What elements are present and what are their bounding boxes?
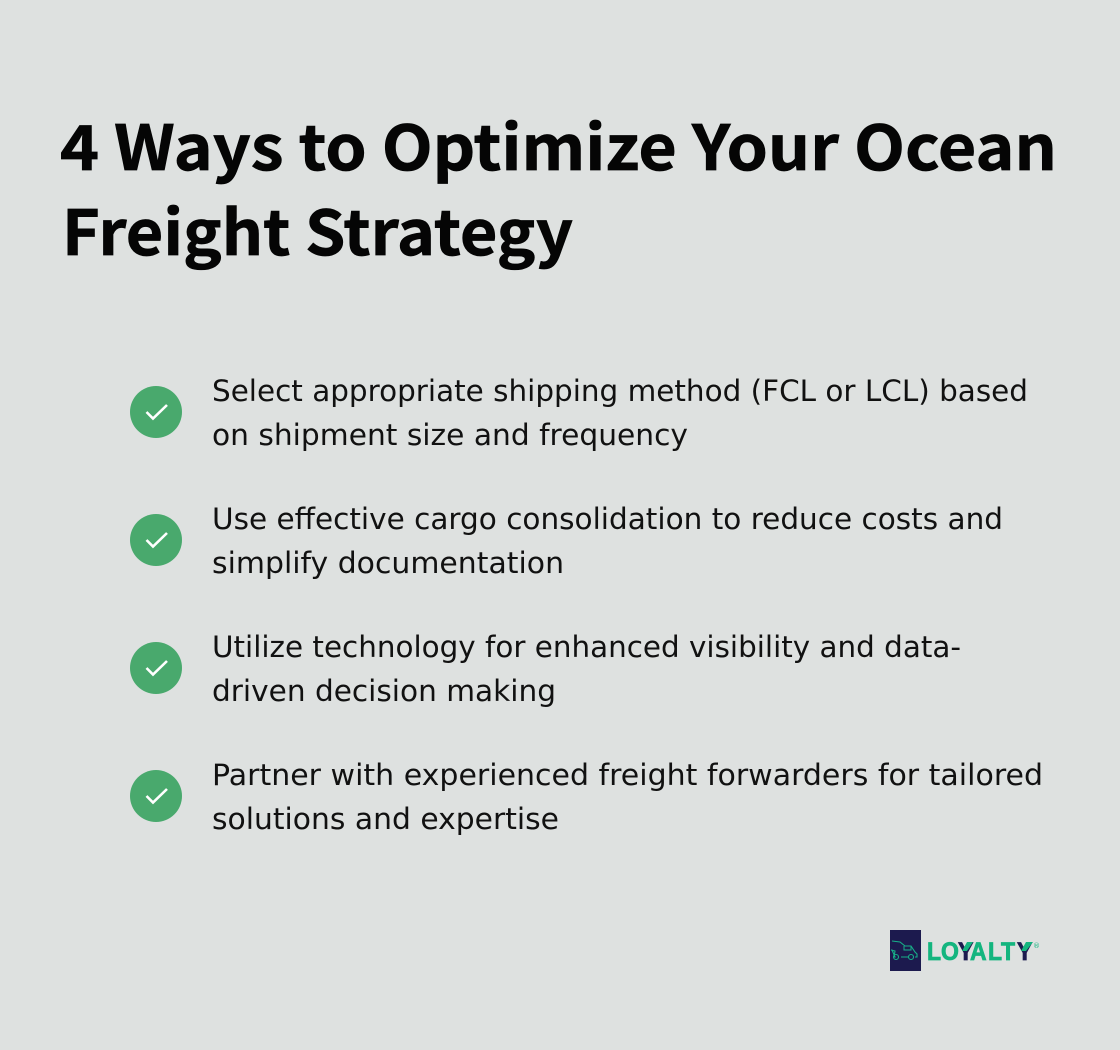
text: item 3: driven decision making: [212, 674, 556, 708]
logo wordmark: Y: [958, 938, 973, 966]
text: item 3: [212, 630, 961, 708]
logo wordmark: ®: [1033, 942, 1040, 950]
logo wordmark: [927, 938, 1040, 966]
text: item 4: [212, 758, 1043, 836]
logo wordmark: T: [1001, 938, 1015, 966]
icon: check badge 1: [130, 386, 182, 438]
logo wordmark: Y: [1017, 938, 1032, 966]
text: item 3: Utilize technology for enhanced visibility and data-: [212, 630, 961, 664]
title: [60, 98, 1057, 273]
text: item 1: [212, 374, 1028, 452]
text: item 4: solutions and expertise: [212, 802, 559, 836]
icon: logo truck tile: [890, 930, 921, 971]
logo: [890, 930, 1040, 971]
logo wordmark: O: [941, 938, 959, 966]
text: item 1: on shipment size and frequency: [212, 418, 688, 452]
title: Freight Strategy: [62, 183, 573, 273]
logo wordmark: L: [927, 938, 941, 966]
icon: check badge 2: [130, 514, 182, 566]
item 3: [130, 630, 961, 708]
logo wordmark: L: [988, 938, 1002, 966]
logo wordmark: A: [970, 938, 987, 966]
item 4: [130, 758, 1043, 836]
text: item 4: Partner with experienced freight forwarders for tailored: [212, 758, 1043, 792]
icon: check badge 4: [130, 770, 182, 822]
icon: check badge 3: [130, 642, 182, 694]
title: 4 Ways to Optimize Your Ocean: [60, 98, 1057, 188]
text: item 2: Use effective cargo consolidation to reduce costs and: [212, 502, 1003, 536]
checklist: [130, 374, 1043, 836]
text: item 2: [212, 502, 1003, 580]
item 2: [130, 502, 1003, 580]
text: item 1: Select appropriate shipping method (FCL or LCL) based: [212, 374, 1028, 408]
text: item 2: simplify documentation: [212, 546, 564, 580]
item 1: [130, 374, 1028, 452]
